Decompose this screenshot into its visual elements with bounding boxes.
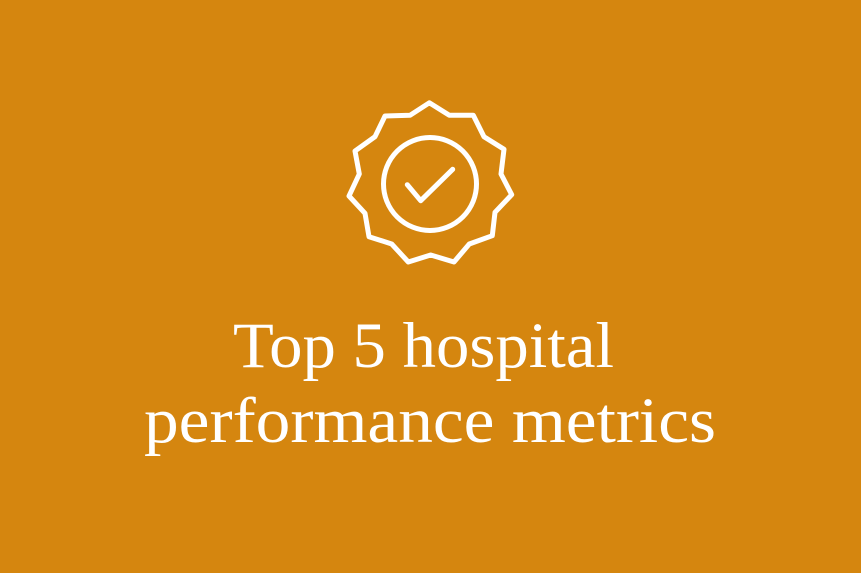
icon: scalloped badge outline [349,103,512,262]
title line 2: performance metrics [144,385,716,457]
icon: check mark [407,169,453,201]
icon: badge with check mark [349,103,512,262]
title [144,310,716,457]
icon: inner circle [384,138,476,230]
title line 1: Top 5 hospital [233,310,614,382]
